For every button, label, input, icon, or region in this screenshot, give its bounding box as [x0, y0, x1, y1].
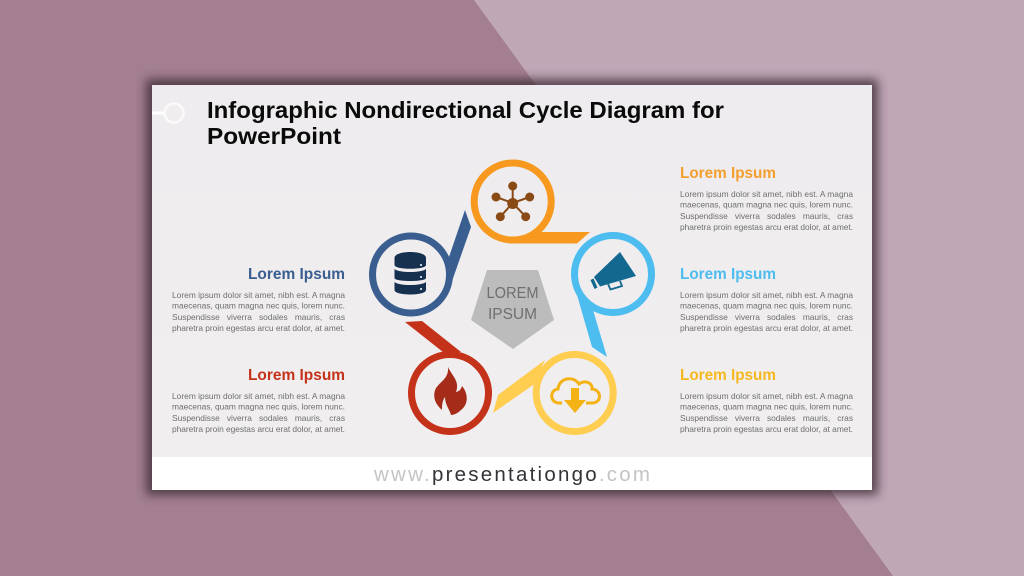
icon: flame	[434, 367, 467, 415]
text block: bottom right: Suspendisse viverra sodales mauris, cras	[680, 413, 853, 423]
title marker icon	[152, 104, 184, 122]
icon: network	[492, 182, 534, 221]
text block: middle right	[680, 266, 853, 333]
footer band	[152, 457, 872, 490]
icon: megaphone	[590, 252, 636, 290]
title: PowerPoint	[207, 123, 341, 149]
text block: middle right: Lorem ipsum dolor sit amet, nibh est. A magna	[680, 290, 853, 300]
text block: middle right: Suspendisse viverra sodales mauris, cras	[680, 312, 853, 322]
text block: top right	[680, 165, 853, 232]
text block: bottom left: pharetra proin egestas arcu erat dolor, at amet.	[172, 424, 345, 434]
text block: bottom left: maecenas, quam magna nec quis, lorem nunc.	[172, 402, 345, 412]
text block: middle left: Lorem ipsum dolor sit amet, nibh est. A magna	[172, 290, 345, 300]
text block: bottom right	[680, 367, 853, 434]
cycle node: light blue megaphone	[574, 236, 652, 357]
cycle node: dark blue database	[372, 210, 471, 313]
text block: bottom right: pharetra proin egestas arcu erat dolor, at amet.	[680, 424, 853, 434]
title	[207, 97, 724, 149]
slide panel	[152, 85, 872, 457]
text block: bottom left: Lorem ipsum dolor sit amet, nibh est. A magna	[172, 391, 345, 401]
cycle node: red flame	[405, 321, 488, 432]
title: Infographic Nondirectional Cycle Diagram for	[207, 97, 724, 123]
center pentagon	[471, 270, 554, 349]
text block: bottom right: maecenas, quam magna nec quis, lorem nunc.	[680, 402, 853, 412]
text block: top right: Suspendisse viverra sodales mauris, cras	[680, 211, 853, 221]
text block: top right: pharetra proin egestas arcu erat dolor, at amet.	[680, 222, 853, 232]
text block: middle left: Suspendisse viverra sodales mauris, cras	[172, 312, 345, 322]
text block: bottom left: Suspendisse viverra sodales mauris, cras	[172, 413, 345, 423]
text block: bottom right: Lorem ipsum dolor sit amet, nibh est. A magna	[680, 391, 853, 401]
cycle node: yellow cloud download	[493, 354, 613, 432]
text block: top right: maecenas, quam magna nec quis, lorem nunc.	[680, 200, 853, 210]
cycle node: orange network	[474, 163, 590, 244]
icon: cloud download	[552, 379, 600, 413]
text block: bottom left	[172, 367, 345, 434]
text block: middle left: Lorem Ipsum	[248, 266, 345, 283]
slide shadow	[146, 79, 878, 495]
text block: middle left: maecenas, quam magna nec quis, lorem nunc.	[172, 300, 345, 310]
icon: database	[394, 252, 426, 294]
text block: bottom right: Lorem Ipsum	[680, 367, 776, 384]
text block: middle right: pharetra proin egestas arcu erat dolor, at amet.	[680, 323, 853, 333]
center pentagon: IPSUM	[488, 306, 537, 323]
text block: middle right: maecenas, quam magna nec quis, lorem nunc.	[680, 300, 853, 310]
footer band: www.presentationgo.com	[373, 463, 650, 486]
text block: bottom left: Lorem Ipsum	[248, 367, 345, 384]
text block: middle right: Lorem Ipsum	[680, 266, 776, 283]
text block: middle left: pharetra proin egestas arcu erat dolor, at amet.	[172, 323, 345, 333]
center pentagon: LOREM	[486, 285, 538, 302]
text block: top right: Lorem Ipsum	[680, 165, 776, 182]
text block: top right: Lorem ipsum dolor sit amet, nibh est. A magna	[680, 189, 853, 199]
text block: middle left	[172, 266, 345, 333]
